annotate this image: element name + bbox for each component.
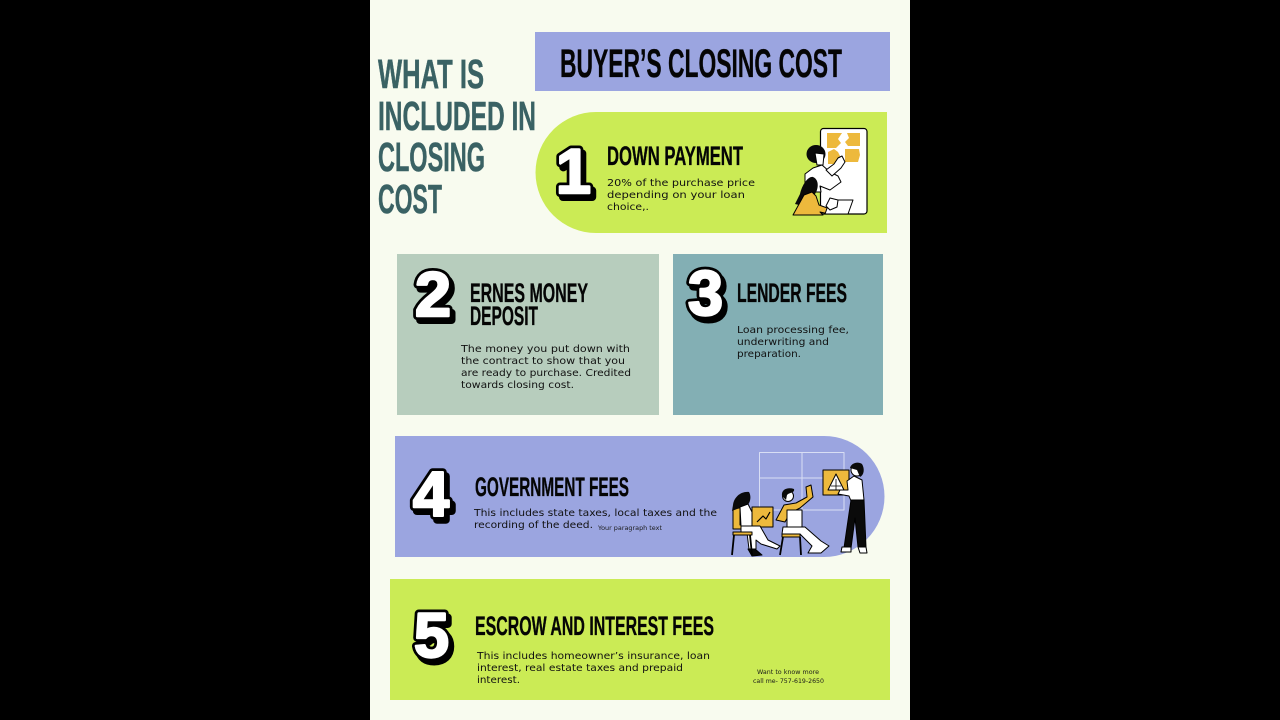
body text: deposit: are ready to purchase. Credited bbox=[461, 368, 631, 379]
placeholder paragraph text: Your paragraph text bbox=[597, 524, 662, 532]
body text: escrow: interest, real estate taxes and prepaid bbox=[477, 663, 683, 674]
number 2: 2 bbox=[415, 260, 451, 330]
page background bbox=[370, 0, 910, 720]
number 4: 4 bbox=[413, 460, 449, 530]
number 3: 3 bbox=[688, 259, 723, 329]
header banner: BUYER’S CLOSING COST bbox=[560, 42, 842, 86]
body text: escrow: This includes homeowner’s insurance, loan bbox=[476, 651, 710, 662]
body text: escrow: interest. bbox=[477, 675, 520, 686]
body text: government fees: recording of the deed. bbox=[474, 520, 593, 531]
body text: government fees: This includes state taxes, local taxes and the bbox=[473, 508, 717, 519]
panel 1: down payment bbox=[536, 112, 887, 233]
number 1: 1 bbox=[559, 141, 594, 211]
body text: lender fees: underwriting and bbox=[737, 337, 829, 348]
panel 4: government fees bbox=[395, 436, 884, 557]
number 1: 1 bbox=[556, 137, 591, 207]
body text: lender fees bbox=[737, 325, 849, 360]
number 3: 3 bbox=[691, 263, 726, 333]
number 5: 5 bbox=[414, 601, 449, 671]
heading: ernes money deposit bbox=[470, 278, 588, 331]
side title: INCLUDED IN bbox=[378, 93, 536, 139]
body text: deposit: towards closing cost. bbox=[461, 380, 574, 391]
body text: escrow bbox=[476, 651, 710, 686]
number 4: 4 bbox=[416, 464, 452, 534]
side title: COST bbox=[378, 176, 442, 222]
heading: lender fees: LENDER FEES bbox=[737, 278, 847, 308]
header banner bbox=[535, 32, 890, 91]
panel 3: lender fees bbox=[673, 254, 883, 415]
number 3: 3 bbox=[688, 259, 723, 329]
contact callout bbox=[753, 668, 824, 685]
number 5: 5 bbox=[414, 601, 449, 671]
icon: two people at puzzle board bbox=[793, 128, 867, 215]
icon: three people with charts bbox=[732, 452, 867, 556]
number 1: 1 bbox=[556, 137, 591, 207]
side title bbox=[378, 51, 536, 222]
heading: government fees: GOVERNMENT FEES bbox=[475, 472, 629, 502]
body text: down payment: choice,. bbox=[607, 202, 649, 213]
heading: escrow and interest fees: ESCROW AND INTEREST FEES bbox=[475, 611, 714, 641]
contact callout: Want to know more bbox=[757, 668, 819, 676]
number 5: 5 bbox=[417, 605, 452, 675]
side title: WHAT IS bbox=[378, 51, 484, 97]
body text: lender fees: preparation. bbox=[737, 349, 801, 360]
body text: government fees bbox=[473, 508, 717, 531]
body text: deposit: The money you put down with bbox=[460, 344, 630, 355]
panel 2: earnest money deposit bbox=[397, 254, 659, 415]
body text: down payment bbox=[607, 178, 755, 213]
number 2: 2 bbox=[418, 264, 454, 334]
heading: ernes money deposit: DEPOSIT bbox=[470, 301, 538, 331]
heading: ernes money deposit: ERNES MONEY bbox=[470, 278, 588, 308]
body text: down payment: 20% of the purchase price bbox=[607, 178, 755, 189]
side title: CLOSING bbox=[378, 134, 485, 180]
number 4: 4 bbox=[413, 460, 449, 530]
body text: deposit: the contract to show that you bbox=[461, 356, 625, 367]
heading: down payment: DOWN PAYMENT bbox=[607, 141, 743, 171]
body text: deposit bbox=[460, 344, 631, 391]
body text: lender fees: Loan processing fee, bbox=[737, 325, 849, 336]
contact callout: call me- 757-619-2650 bbox=[753, 677, 824, 685]
panel 5: escrow and interest fees bbox=[390, 579, 890, 700]
number 2: 2 bbox=[415, 260, 451, 330]
body text: down payment: depending on your loan bbox=[607, 190, 745, 201]
